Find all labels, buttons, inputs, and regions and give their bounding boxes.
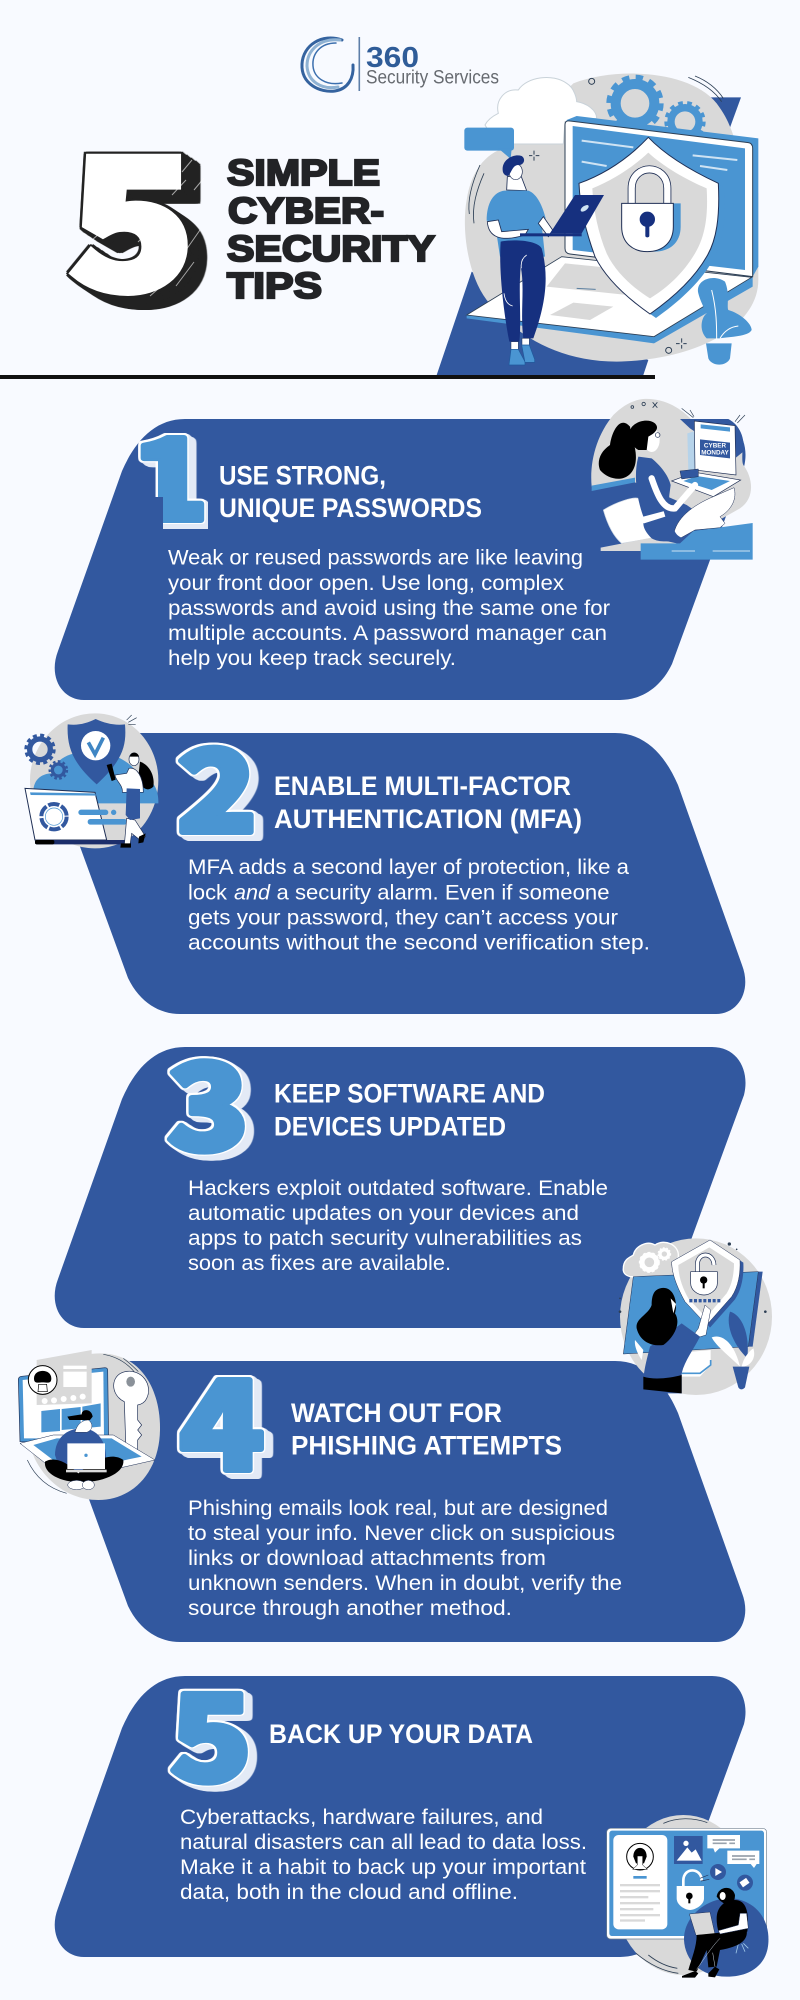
title: 5 simple cyber-security tips: CYBER- xyxy=(228,190,384,231)
illustration: woman entering password at monitor xyxy=(619,1238,772,1395)
body text: Weak or reused passwords are like leaving xyxy=(168,546,583,570)
title: 5 simple cyber-security tips xyxy=(227,152,435,306)
body text: links or download attachments from xyxy=(188,1547,546,1570)
body text: MFA adds a second layer of protection, like a xyxy=(188,856,629,879)
divider line xyxy=(0,375,655,379)
body text: data, both in the cloud and offline. xyxy=(180,1881,518,1904)
panel background xyxy=(55,1047,746,1328)
heading xyxy=(291,1398,562,1460)
laptop: CYBER xyxy=(704,443,727,450)
woman xyxy=(107,753,154,848)
gray blob xyxy=(620,1238,772,1395)
floor triangle xyxy=(437,272,648,375)
heading: WATCH OUT FOR xyxy=(291,1398,502,1428)
heading: AUTHENTICATION (MFA) xyxy=(274,804,582,834)
panel 4: watch out for phishing attempts xyxy=(54,1326,745,1642)
shield with lock xyxy=(672,1240,743,1328)
numeral 1: 1 xyxy=(131,389,209,553)
numeral 5: 5 xyxy=(170,1642,252,1816)
logo wordmark 360: 360 xyxy=(366,42,419,74)
body text xyxy=(188,856,650,954)
cloud xyxy=(485,78,597,144)
seated person xyxy=(682,1888,768,1978)
body text: unknown senders. When in doubt, verify the xyxy=(188,1572,622,1595)
sparkle marks xyxy=(682,408,745,423)
icon: logo swirl xyxy=(302,38,353,91)
cloud with gears xyxy=(623,1242,678,1277)
gray blob xyxy=(615,1815,752,1975)
body text: lock xyxy=(188,882,228,904)
floor and seat xyxy=(601,538,677,551)
laptop xyxy=(672,421,741,497)
body text: your front door open. Use long, complex xyxy=(168,572,565,595)
heading xyxy=(274,771,582,834)
gray blob xyxy=(591,399,751,523)
woman xyxy=(635,1288,711,1393)
screen xyxy=(607,1828,767,1939)
heading xyxy=(219,460,482,523)
monitor xyxy=(623,1272,763,1377)
panel 2: enable multi-factor authentication xyxy=(54,701,745,1014)
body text: Make it a habit to back up your important xyxy=(180,1856,586,1879)
body text xyxy=(168,546,610,670)
body text xyxy=(188,1497,622,1620)
spark xyxy=(127,715,137,724)
person xyxy=(487,155,604,365)
heading xyxy=(274,1078,545,1142)
body text: Cyberattacks, hardware failures, and xyxy=(180,1806,543,1829)
pillow xyxy=(603,498,652,543)
shield with check xyxy=(68,719,125,784)
laptop base xyxy=(20,1435,155,1480)
heading: ENABLE MULTI-FACTOR xyxy=(274,771,571,801)
arcs xyxy=(636,1819,707,1973)
panel background xyxy=(55,1676,746,1957)
logo wordmark Security Services: Security Services xyxy=(366,68,499,88)
numeral 2: 2 xyxy=(177,701,257,865)
body text: a security alarm. Even if someone xyxy=(276,882,610,904)
gray blob xyxy=(30,713,158,848)
body text: source through another method. xyxy=(188,1597,512,1620)
panel background xyxy=(54,733,745,1014)
panel background xyxy=(54,1361,745,1642)
title: 5 simple cyber-security tips: SIMPLE xyxy=(227,152,380,193)
gears xyxy=(609,77,704,140)
blue cloud xyxy=(33,753,158,803)
numeral 3: 3 xyxy=(167,1011,249,1185)
body text: automatic updates on your devices and xyxy=(188,1202,579,1225)
illustration: person with laptop and security shield xyxy=(437,74,758,375)
body text: passwords and avoid using the same one for xyxy=(168,597,610,620)
panel background xyxy=(55,419,746,700)
logo: 360 Security Services xyxy=(302,37,499,91)
heading: KEEP SOFTWARE AND xyxy=(274,1078,545,1108)
body text: to steal your info. Never click on suspicious xyxy=(188,1522,615,1545)
title: 5 simple cyber-security tips: TIPS xyxy=(227,265,322,306)
key xyxy=(114,1371,149,1455)
plant xyxy=(712,1312,754,1389)
heading: PHISHING ATTEMPTS xyxy=(291,1430,562,1460)
speech bubble xyxy=(464,128,514,159)
plant xyxy=(698,278,752,365)
illustration: hacker with key xyxy=(18,1350,160,1500)
numeral 4: 4 xyxy=(180,1326,264,1506)
body text: soon as fixes are available. xyxy=(188,1252,451,1275)
small dots xyxy=(631,402,657,408)
body text: multiple accounts. A password manager can xyxy=(168,622,607,645)
blue corner behind laptop xyxy=(680,419,744,458)
body text: and xyxy=(234,882,271,904)
panel 1: use strong, unique passwords xyxy=(55,389,746,700)
body text: gets your password, they can’t access your xyxy=(188,906,618,930)
gray blob xyxy=(30,1353,160,1500)
heading: DEVICES UPDATED xyxy=(274,1112,506,1142)
body text: natural disasters can all lead to data loss. xyxy=(180,1831,587,1854)
monitor xyxy=(25,788,127,844)
body text: accounts without the second verification step. xyxy=(188,932,650,954)
gray blob xyxy=(465,74,758,362)
small marks xyxy=(619,1242,767,1313)
icon: shield with padlock xyxy=(579,137,725,318)
body text: Hackers exploit outdated software. Enable xyxy=(188,1177,608,1200)
woman xyxy=(599,421,735,541)
monitor xyxy=(18,1350,109,1443)
illustration: woman with verified shield xyxy=(25,713,158,848)
laptop: MONDAY xyxy=(701,449,730,456)
body text: apps to patch security vulnerabilities as xyxy=(188,1227,582,1250)
shelf strip xyxy=(592,478,635,491)
hacker xyxy=(45,1410,123,1490)
top right triangle xyxy=(707,97,741,134)
heading: USE STRONG, xyxy=(219,460,386,490)
illustration: person backing up data xyxy=(607,1815,768,1978)
small circles and sparkles xyxy=(529,78,687,353)
laptop xyxy=(467,116,758,343)
body text xyxy=(188,1177,608,1275)
logo divider xyxy=(358,37,360,91)
title: 5 simple cyber-security tips: SECURITY xyxy=(227,228,435,269)
gears xyxy=(26,735,67,779)
panel 5: back up your data xyxy=(55,1642,746,1957)
arcs xyxy=(27,1354,138,1493)
panel 3: keep software and devices updated xyxy=(55,1011,746,1328)
arcs xyxy=(469,76,723,223)
heading: UNIQUE PASSWORDS xyxy=(219,493,482,523)
body text: Phishing emails look real, but are designed xyxy=(188,1497,608,1520)
heading: BACK UP YOUR DATA xyxy=(269,1719,533,1749)
body text: help you keep track securely. xyxy=(168,647,456,670)
big numeral 5: 5 xyxy=(70,81,194,341)
illustration: woman on laptop, cyber monday xyxy=(591,399,753,560)
body text xyxy=(180,1806,587,1904)
